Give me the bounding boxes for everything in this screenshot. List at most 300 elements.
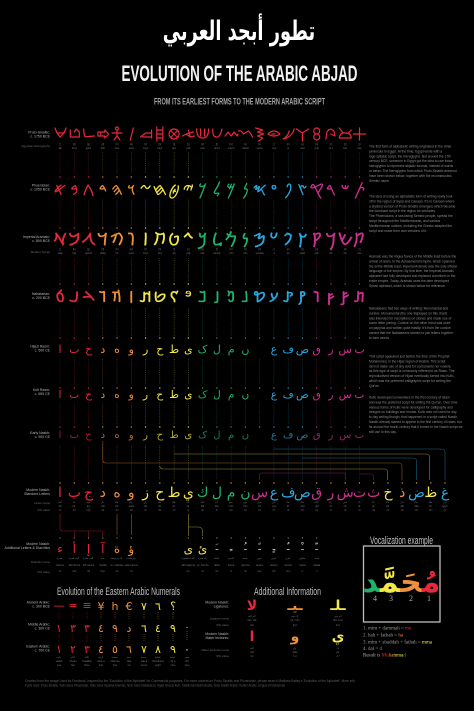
row: Nabataean letters: 𐢑 xyxy=(214,287,220,307)
row: additional letter names: /ʔaː/ xyxy=(100,570,105,573)
row: Imperial Aramaic letters: 𐡉 xyxy=(183,230,194,250)
row labels: Proto-Sinaitic: xyxy=(28,130,50,134)
row: additional letter names: تاء مربوطة xyxy=(111,557,123,560)
row: Kufi Rasm letters: س xyxy=(339,389,352,401)
row: Syriac labels: [ṣ] xyxy=(301,248,304,251)
mater lectionis captions: ألف xyxy=(250,646,254,650)
row: Egyptian hieroglyph labels: ṭayt xyxy=(172,147,176,150)
row: Early Naskh letters xyxy=(59,430,364,441)
row: Modern Naskh additional letters and diacritics: ـٍ xyxy=(272,543,276,553)
explanatory paragraphs column: The idea of using an alphabetic form of writing really took xyxy=(369,194,453,198)
row: Imperial Aramaic letters: 𐡃 xyxy=(97,230,108,250)
explanatory paragraphs column: Semitic name. xyxy=(369,179,390,183)
row: Syriac labels: [s] xyxy=(258,248,261,251)
vocalization heading: Vocalization example xyxy=(370,535,433,547)
row: additional letter names: واو همزة xyxy=(126,557,136,560)
row: modern letter names and IPA: حاء xyxy=(158,501,162,504)
explanatory paragraphs column: have been shown below, together with the reconstructed, xyxy=(369,174,452,178)
row: Early Naskh letters: ى xyxy=(184,430,192,441)
row: modern letter names and IPA: /sˤ/ xyxy=(301,509,304,512)
row: Kufi Rasm letters: ر xyxy=(327,389,333,401)
row: additional letter names: ألف همزة xyxy=(69,556,80,560)
connector lines to derived letters xyxy=(60,441,445,537)
row: Imperial Aramaic letters: 𐡇 xyxy=(153,230,166,250)
row: Syriac labels: [d] xyxy=(101,248,104,251)
row: modern letter names and IPA: /x/ xyxy=(387,509,390,512)
row: Egyptian hieroglyph labels: haw xyxy=(115,147,119,150)
explanatory paragraphs column: language of the empire. By that time, the Imperial Aramaic xyxy=(369,269,454,273)
row: Modern Naskh standard letters: ك xyxy=(197,485,208,501)
explanatory paragraphs column: Nabataeans had two ways of writing: Monumental and xyxy=(369,306,448,310)
mater lectionis captions: yāʾ xyxy=(336,651,340,654)
mater lectionis glyphs: ا xyxy=(250,629,254,645)
row: additional letter names: /in/ xyxy=(272,570,276,573)
row: Syriac labels: ḥēṯ xyxy=(158,252,162,255)
row: additional letter names: /an/ xyxy=(258,570,262,573)
numerals labels xyxy=(26,600,51,652)
row: Nabataean letters: 𐢊 xyxy=(140,287,152,307)
heading: additional information: Additional Information xyxy=(254,586,321,598)
row: Early Naskh letters: ط xyxy=(169,430,179,441)
row: Modern Naskh standard letters: ز xyxy=(141,485,149,501)
row: modern letter names and IPA: هاء xyxy=(115,501,119,504)
ligature captions: لام ألف xyxy=(248,614,256,618)
row: Phoenician letters: 𐤈 xyxy=(168,180,180,200)
row: modern letter names and IPA: ṯāʾ xyxy=(372,505,375,508)
ancient numerals row xyxy=(54,599,176,613)
numeral names: nine xyxy=(171,664,176,667)
row: modern letter names and IPA: ياء xyxy=(187,501,190,504)
row: modern letter names and IPA: /dˤ/ xyxy=(415,509,419,512)
row: Imperial Aramaic letters: 𐡈 xyxy=(168,230,180,250)
row: Modern Naskh standard letters: ذ xyxy=(399,485,405,501)
row: Nabataean letters: 𐢋 xyxy=(153,287,166,307)
middle numerals row: ٤ xyxy=(98,622,104,635)
row: Egyptian hieroglyph labels: [ḥ] xyxy=(158,143,161,146)
row: Kufi Rasm letters: ص xyxy=(296,389,309,401)
additional information labels: Mater lectionis name xyxy=(201,648,229,652)
row: modern letter names and IPA: ألف xyxy=(58,500,62,504)
eastern numerals row: ٠ xyxy=(184,643,190,656)
ligature captions xyxy=(248,614,343,627)
numeral names: sitta xyxy=(127,660,132,663)
row labels: c. 900 CE xyxy=(35,435,51,439)
numeral names: eight xyxy=(155,664,161,667)
credits: Fonts used: Proto-Sinaitic, Noto Sans Phoenician, Noto Sans Imperial Aramaic, Noto Sans Nabataean, Hijazi Ghuzzi Kufi, Traditional Naskh Arabic, Noto Naskh Arabic, Kufam Arabic, Ungulo Al Muhannad xyxy=(25,684,285,688)
explanatory paragraphs column: to day writing though, that happened in a script called Naskh. xyxy=(369,415,458,419)
row: modern letter names and IPA: /tˤ/ xyxy=(173,509,176,512)
row: Syriac labels: taw xyxy=(358,252,362,255)
row: modern letter names and IPA: /h/ xyxy=(116,509,119,512)
row: Hijazi Rasm letters: ڡ xyxy=(282,343,294,356)
row: Nabataean letters: 𐢝 xyxy=(340,287,350,307)
row: Nabataean letters: 𐢕 xyxy=(242,287,249,307)
Arabic title: تطور أبجد العربي xyxy=(163,12,315,47)
row: Phoenician letters: 𐤔 xyxy=(341,180,350,200)
row labels: c. 650 CE xyxy=(35,392,51,396)
row: additional letter names: همزة xyxy=(57,557,63,560)
explanatory paragraphs column: Mohammed, in the Hijaz region of Arabia. This script xyxy=(369,359,445,363)
row: modern letter names and IPA: /d/ xyxy=(101,509,104,512)
row: Imperial Aramaic letters: 𐡕 xyxy=(353,230,365,250)
row: additional letter names: hamza xyxy=(56,564,64,567)
row: Hijazi Rasm letters: ٮ xyxy=(354,343,365,356)
row: Kufi Rasm letters: ح xyxy=(85,389,92,401)
row: Phoenician letters: 𐤅 xyxy=(127,180,135,200)
row: Phoenician letters: 𐤀 xyxy=(54,180,66,200)
row: Nabataean letters: 𐢉 xyxy=(129,287,134,307)
eastern numerals row: ٢ xyxy=(70,643,76,656)
row: Kufi Rasm letters: و xyxy=(128,389,134,401)
middle numerals row: ٣ xyxy=(70,622,76,635)
row: Syriac labels: [t] xyxy=(358,248,361,251)
row: Syriac labels: nūn xyxy=(243,252,248,255)
explanatory paragraphs column: entire empire. Today, Aramaic uses the later developed xyxy=(369,279,449,283)
row: Nabataean letters: 𐢖 xyxy=(254,287,266,307)
row: Kufi Rasm letters: ح xyxy=(156,389,163,401)
row: Syriac labels: [m] xyxy=(229,248,233,251)
row: modern letter names and IPA: ḏāl xyxy=(401,505,404,508)
row: Imperial Aramaic letters: 𐡄 xyxy=(110,230,124,250)
row: modern letter names and IPA: tāʾ xyxy=(358,505,361,508)
row: Modern Naskh standard letters: ي xyxy=(183,485,194,501)
row labels: c. 200 BCE xyxy=(32,296,51,300)
mater lectionis glyphs xyxy=(250,629,345,646)
row: Early Naskh letters: ه xyxy=(114,430,120,441)
mater lectionis captions: /uː/ xyxy=(293,655,297,658)
numeral names: ṣifr xyxy=(185,660,189,663)
explanatory paragraphs column: did not make use of any dots for consonants nor vowels, xyxy=(369,364,451,368)
numerals connectors xyxy=(59,612,187,641)
row labels: Diacritic name xyxy=(31,560,50,564)
row: Modern Naskh additional letters and diacritics xyxy=(57,541,318,557)
row: Egyptian hieroglyph labels: [b] xyxy=(73,143,76,146)
row: Hijazi Rasm letters: ع xyxy=(271,343,278,356)
row: Phoenician letters: 𐤊 xyxy=(198,180,207,200)
explanatory paragraphs column: the dominant script in the region for centuries. xyxy=(369,209,436,213)
explanatory paragraphs column: logo-syllabic script, the hieroglyphs. But around the 17th xyxy=(369,154,451,158)
row: modern letter names and IPA: قاف xyxy=(314,500,319,504)
row: Phoenician letters: 𐤕 xyxy=(354,180,365,200)
middle numerals row: ٩ xyxy=(112,622,118,635)
row: Syriac labels: ṭēṯ xyxy=(173,252,176,255)
row: additional letter names: تنوين xyxy=(257,557,263,560)
row: modern letter names and IPA: yāʾ xyxy=(187,505,190,508)
row: Hijazi Rasm letters: ٮ xyxy=(69,343,79,356)
row: additional letter names: yāʾ hamza xyxy=(197,564,209,567)
explanatory paragraphs column: designs on buildings and murals. Kufic was not used for day xyxy=(369,410,457,414)
row: Nabataean letters: 𐢃 xyxy=(69,287,79,307)
row: Hijazi Rasm letters: ى xyxy=(184,343,193,356)
row labels: Imperial Aramaic: xyxy=(23,235,50,239)
row: Hijazi Rasm letters: ط xyxy=(169,343,179,356)
row: Kufi Rasm letters: ل xyxy=(213,389,221,401)
row: Modern Naskh additional letters and diacritics: ى xyxy=(184,542,193,556)
row: modern letter names and IPA: فاء xyxy=(286,501,290,504)
row: Syriac labels: qōp xyxy=(315,252,319,255)
row: Phoenician letters: 𐤉 xyxy=(183,180,194,200)
row: Phoenician letters: 𐤃 xyxy=(99,180,107,200)
row: Nabataean letters: 𐢞 xyxy=(354,287,365,307)
numerals labels: Eastern Arabic: xyxy=(26,644,50,648)
explanatory paragraphs column: The Phoenicians, a sea-faring Semitic people, spread the xyxy=(369,214,453,218)
explanatory paragraphs column: some letter joining. Cursive on the other hand was used xyxy=(369,321,451,325)
row: Nabataean letters: 𐢎 xyxy=(185,287,191,307)
row: Early Naskh letters: و xyxy=(128,430,134,441)
row labels: Egyptian Hieroglyphs xyxy=(22,144,50,148)
row: Egyptian hieroglyph labels: [s] xyxy=(258,143,261,146)
row labels: Additional Letters & Diacritics xyxy=(4,546,50,550)
row labels: Letter name xyxy=(34,501,50,505)
row: Egyptian hieroglyph labels: pi xyxy=(287,147,290,150)
row: Hijazi Rasm letters: ل xyxy=(213,343,221,356)
row: Early Naskh letters: ص xyxy=(296,430,308,441)
row: Modern Naskh additional letters and diacritics: إ xyxy=(87,542,90,556)
row: Nabataean letters: 𐢓 xyxy=(227,287,235,307)
numeral names: تسعة xyxy=(170,656,176,659)
row: modern letter names and IPA: /ħ/ xyxy=(158,509,161,512)
row: Modern Naskh additional letters and diacritics: ـْ xyxy=(300,542,304,553)
row: Hijazi Rasm letters: ر xyxy=(327,343,334,356)
row: Phoenician letters: 𐤑 xyxy=(297,180,307,200)
explanatory paragraphs column: Kufic developed somewhere in the first century of Islam xyxy=(369,396,450,400)
row: additional letter names: kasra xyxy=(228,564,235,567)
row: Syriac labels: [ʿ] xyxy=(273,248,275,251)
mater lectionis captions: ياء xyxy=(337,647,340,650)
row labels: Nabataean: xyxy=(32,292,50,296)
numeral names: sabʿa xyxy=(141,660,148,663)
row labels: IPA value xyxy=(38,570,50,574)
row: Kufi Rasm letters: ر xyxy=(142,389,148,401)
step numbers xyxy=(373,594,431,603)
row: modern letter names and IPA: ثاء xyxy=(372,501,375,504)
explanatory paragraphs column: to form words. xyxy=(369,336,390,340)
numeral names: ithnān xyxy=(70,660,77,663)
row: Imperial Aramaic letters: 𐡐 xyxy=(283,230,293,250)
row: Phoenician letters: 𐤄 xyxy=(111,180,123,200)
middle numerals row: ٤ xyxy=(155,622,161,635)
row: modern letter names and IPA: /j/ xyxy=(187,509,190,512)
ligature captions: لام ميم xyxy=(334,615,342,618)
row: Phoenician letters: 𐤂 xyxy=(83,180,94,200)
row: Kufi Rasm letters: ٮ xyxy=(69,389,79,401)
row: Egyptian hieroglyph labels: [ʿ] xyxy=(273,143,275,146)
explanatory paragraphs column: the entire Middle East, Imperial Aramaic was the sole official xyxy=(369,264,457,268)
row: Modern Naskh standard letters: د xyxy=(100,485,106,501)
explanatory paragraphs column: The first form of alphabetic writing originated in the Sinai xyxy=(369,144,451,148)
eastern numerals row: ١ xyxy=(56,643,62,656)
row: Modern Naskh standard letters: ط xyxy=(168,485,181,501)
row: modern letter names and IPA: rāʾ xyxy=(329,505,333,508)
row: Phoenician letters: 𐤎 xyxy=(253,180,267,200)
row labels: c. 1050 BCE xyxy=(30,188,51,192)
numeral names: اثنان xyxy=(70,656,76,659)
row: additional letter names: /ʔa/ xyxy=(72,570,77,573)
row: modern letter names and IPA: jīm xyxy=(86,505,90,508)
row: Modern Naskh additional letters and diacritics: ة xyxy=(114,542,120,556)
row: Egyptian hieroglyph labels: kap xyxy=(201,147,205,150)
step numbers: 4 xyxy=(373,594,377,603)
row: additional letter names: alif maqṣūra xyxy=(181,564,196,567)
numerals labels: c. 300 BCE xyxy=(32,604,51,608)
row: Syriac labels: bēṯ xyxy=(73,252,76,255)
row: Egyptian hieroglyph labels: [m] xyxy=(229,143,233,146)
row: modern letter names and IPA: زاي xyxy=(143,501,148,504)
eastern numerals row xyxy=(56,643,190,656)
row: Syriac labels: [w] xyxy=(130,248,133,251)
row labels: Early Naskh: xyxy=(30,431,50,435)
numeral names: four xyxy=(99,664,103,667)
row: modern letter names and IPA: ġayn xyxy=(442,505,448,508)
vocalization steps: Result is Muhammad xyxy=(363,654,406,658)
row: Modern Naskh standard letters: غ xyxy=(441,485,450,501)
row: additional letter names: ألف همزة xyxy=(83,556,94,560)
middle numerals row: د xyxy=(127,622,132,635)
row: modern letter names and IPA: كاف xyxy=(200,500,205,504)
mater lectionis captions: wāw xyxy=(292,651,298,654)
row: Imperial Aramaic letters: 𐡍 xyxy=(242,230,249,250)
ligature captions: /jm/ xyxy=(293,624,297,627)
row: modern letter names and IPA: /t/ xyxy=(358,509,361,512)
row: Early Naskh letters: ح xyxy=(157,430,164,441)
row: Egyptian hieroglyph labels: [w] xyxy=(130,143,133,146)
row: modern letter names and IPA: غين xyxy=(443,501,448,504)
row: Egyptian hieroglyph labels: [l] xyxy=(216,143,218,146)
row: Hijazi Rasm letters: ٯ xyxy=(312,343,321,356)
row: Modern Naskh standard letters: س xyxy=(251,485,268,501)
numeral names: five xyxy=(113,664,118,667)
row labels: c. 500 CE xyxy=(35,348,51,352)
explanatory paragraphs column: Naskh already started to appear in the first century of Islam, but xyxy=(369,420,462,424)
row: Syriac labels: rēš xyxy=(329,252,333,255)
row: Nabataean letters: 𐢁 xyxy=(55,287,65,307)
step numbers: 1 xyxy=(427,594,431,603)
ligature glyphs xyxy=(247,598,346,614)
explanatory paragraphs column: This script appeared just before the time of the Prophet xyxy=(369,354,450,358)
row: Modern Naskh additional letters and diacritics: آ xyxy=(100,541,105,556)
row: Hijazi Rasm letters: ح xyxy=(85,343,93,356)
row: Imperial Aramaic letters: 𐡑 xyxy=(297,230,308,250)
row: Syriac labels: šīn xyxy=(344,252,347,255)
row labels: Standard Letters xyxy=(24,492,50,496)
row: Hijazi Rasm letters: ه xyxy=(114,343,120,356)
row: modern letter names and IPA: /ð/ xyxy=(401,509,404,512)
row: modern letter names and IPA: طاء xyxy=(172,501,176,504)
row: Modern Naskh additional letters and diacritics: ـُ xyxy=(243,542,247,553)
explanatory paragraphs column: cursive. Monumental (the one displayed on this chart) xyxy=(369,311,447,315)
row: Modern Naskh additional letters and diacritics: ئ xyxy=(198,542,207,556)
explanatory paragraphs column: which was the preferred calligraphic script for writing the xyxy=(369,379,451,383)
row: Imperial Aramaic letters: 𐡁 xyxy=(68,230,80,250)
numeral names: واحد xyxy=(56,656,62,659)
numeral names: سبعة xyxy=(141,656,147,659)
row: Syriac labels: yōḏ xyxy=(186,252,191,255)
row: Egyptian hieroglyph labels: [k] xyxy=(201,143,204,146)
mater lectionis captions: /iː/ xyxy=(337,655,340,658)
ligature captions: yāʾ mīm xyxy=(290,619,300,622)
row labels: c. 800 BCE xyxy=(32,239,51,243)
row labels: Modern Syriac xyxy=(31,250,50,254)
row: Nabataean letters: 𐢌 xyxy=(170,287,179,307)
row: modern letter names and IPA: خاء xyxy=(386,501,390,504)
row: Kufi Rasm letters: ٯ xyxy=(313,389,321,401)
row: Modern Naskh standard letters: ض xyxy=(408,485,425,501)
row: Egyptian hieroglyph labels: [ʾ] xyxy=(59,143,61,146)
row: Imperial Aramaic letters: 𐡔 xyxy=(337,230,353,250)
row labels xyxy=(4,130,51,574)
additional information labels: IPA value xyxy=(217,623,229,627)
row: modern letter names and IPA: شين xyxy=(342,501,348,504)
explanatory paragraphs column: arrival of Islam. In the Achaemenid Empire, which spanned xyxy=(369,259,455,263)
row: Early Naskh letters: ں xyxy=(242,430,249,441)
numeral names xyxy=(56,655,190,667)
row: Egyptian hieroglyph labels: raʾs xyxy=(329,147,334,150)
row: Syriac labels: [g] xyxy=(87,248,90,251)
row: Modern Naskh additional letters and diacritics: ـَ xyxy=(215,543,219,553)
row: Modern Naskh standard letters: ر xyxy=(327,485,334,501)
row: Egyptian hieroglyph labels: gaml xyxy=(86,147,92,150)
row: modern letter names and IPA: hāʾ xyxy=(115,505,119,508)
row: Hijazi Rasm letters: ح xyxy=(156,343,164,356)
numeral names: tisʿa xyxy=(171,660,176,663)
row: Nabataean letters: 𐢅 xyxy=(99,287,107,307)
row: Early Naskh letters: س xyxy=(339,430,351,441)
row: modern letter names and IPA: /l/ xyxy=(216,509,218,512)
row: Egyptian hieroglyph labels: [ṣ] xyxy=(301,143,304,146)
row: modern letter names and IPA: /d͡ʒ/ xyxy=(86,509,91,512)
row: modern letter names and IPA xyxy=(58,500,448,512)
numeral names: two xyxy=(71,664,76,667)
row: additional letter names: سكون xyxy=(299,557,306,560)
row: additional letter names: /ʔ/ xyxy=(201,570,204,573)
row: modern letter names and IPA: /ʕ/ xyxy=(273,509,276,512)
row: modern letter names and IPA: /b/ xyxy=(73,509,76,512)
row: Imperial Aramaic letters: 𐡂 xyxy=(81,230,96,250)
numeral names: arbaʿa xyxy=(97,660,105,663)
row: modern letter names and IPA: šīn xyxy=(344,505,347,508)
row: Imperial Aramaic letters: 𐡀 xyxy=(53,230,67,250)
row: Modern Naskh standard letters: ظ xyxy=(424,485,437,501)
vocalized word: مُحَمَّد xyxy=(363,565,440,600)
row: modern letter names and IPA: عين xyxy=(271,501,276,504)
eastern numerals row: ٧ xyxy=(141,643,147,656)
row: Early Naskh letters: ا xyxy=(59,430,61,441)
row labels: Phoenician: xyxy=(32,184,50,188)
ancient numerals row: ¥ xyxy=(98,600,104,613)
row: Egyptian hieroglyph labels: yad xyxy=(186,147,191,150)
ligature captions: /la/ xyxy=(250,624,254,627)
row: modern letter names and IPA: ḥāʾ xyxy=(158,505,162,508)
row: Modern Naskh standard letters: ه xyxy=(113,485,121,501)
mater lectionis captions: /aː/ xyxy=(250,655,254,658)
row: Syriac labels: [q] xyxy=(315,248,318,251)
row: Modern Naskh standard letters xyxy=(58,485,450,501)
ligature glyphs: ـلـ xyxy=(329,598,346,614)
row: modern letter names and IPA: واو xyxy=(128,501,133,504)
row: modern letter names and IPA: ḍād xyxy=(414,505,419,508)
explanatory paragraphs column: Syriac alphabet, which is shown below for reference. xyxy=(369,284,446,288)
vocalization steps: 2. hah + fathah = ha xyxy=(363,634,404,638)
row: additional letter names: كسرة xyxy=(228,557,235,560)
row: Modern Naskh standard letters: ش xyxy=(337,485,354,501)
row: modern letter names and IPA: راء xyxy=(329,501,333,504)
explanatory paragraphs column: hieroglyphs to represent abjadic sounds, instead of words xyxy=(369,164,453,168)
row: modern letter names and IPA: dāl xyxy=(101,505,105,508)
row: Egyptian hieroglyph labels: dalt xyxy=(101,147,105,150)
ancient numerals row: € xyxy=(126,600,132,613)
vertical dotted connectors between script rows xyxy=(60,152,360,480)
explanatory paragraphs column: century BCE, someone in Egypt got the idea to use those xyxy=(369,159,453,163)
